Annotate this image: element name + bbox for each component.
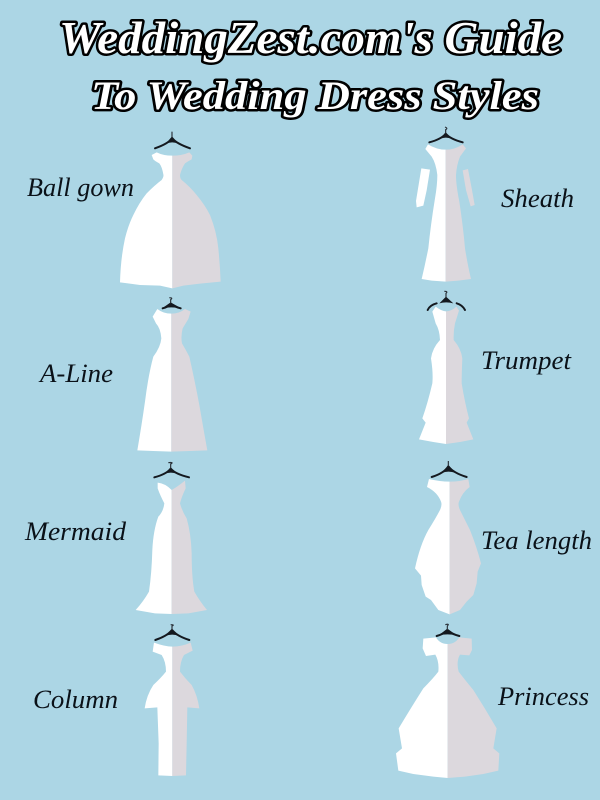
label: a-line: A-Line — [38, 359, 113, 388]
dress: a-line — [137, 298, 207, 452]
title: WeddingZest.com's Guide — [59, 12, 562, 63]
dress: sheath — [416, 127, 475, 282]
dress: princess — [396, 624, 499, 778]
dress: ball gown — [120, 132, 221, 288]
label: princess: Princess — [497, 682, 589, 711]
dress: trumpet — [419, 291, 473, 444]
label: ball gown: Ball gown — [27, 173, 134, 202]
label: sheath: Sheath — [501, 184, 574, 213]
label: trumpet: Trumpet — [481, 346, 572, 375]
label: tea length: Tea length — [481, 526, 592, 555]
label: column: Column — [33, 685, 118, 714]
dress: column — [145, 625, 199, 776]
label: mermaid: Mermaid — [24, 517, 127, 546]
title — [59, 12, 562, 118]
dress: tea length — [415, 461, 481, 614]
dress: mermaid — [136, 462, 207, 614]
title: To Wedding Dress Styles — [91, 73, 539, 118]
